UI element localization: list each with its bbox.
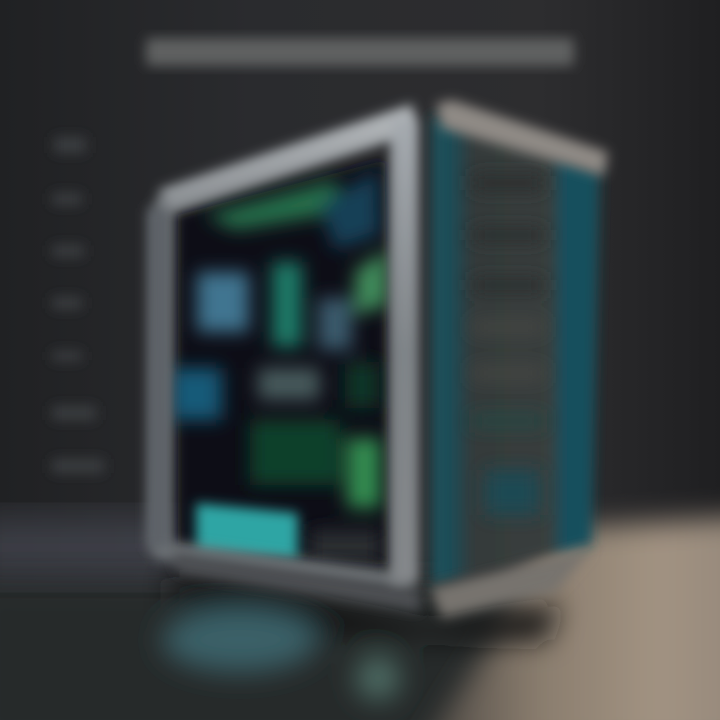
- table surface: [0, 515, 720, 720]
- front frame: [160, 125, 402, 582]
- title bar: [146, 38, 574, 66]
- computer case: [147, 100, 608, 700]
- top right edge: [436, 100, 608, 176]
- side list of labels: [52, 137, 104, 473]
- cyan power supply: [196, 503, 298, 560]
- right beige surface: [420, 515, 720, 720]
- right lower edge: [430, 548, 592, 618]
- bright top and pillar highlights: [147, 104, 420, 612]
- interior: [178, 160, 388, 565]
- right panel vent rows: [472, 175, 544, 515]
- right side panel: [432, 115, 600, 585]
- dark floor: [0, 580, 590, 720]
- left lit band: [0, 525, 190, 570]
- case shadow and floor reflection: [162, 575, 560, 700]
- interior components: [170, 170, 388, 562]
